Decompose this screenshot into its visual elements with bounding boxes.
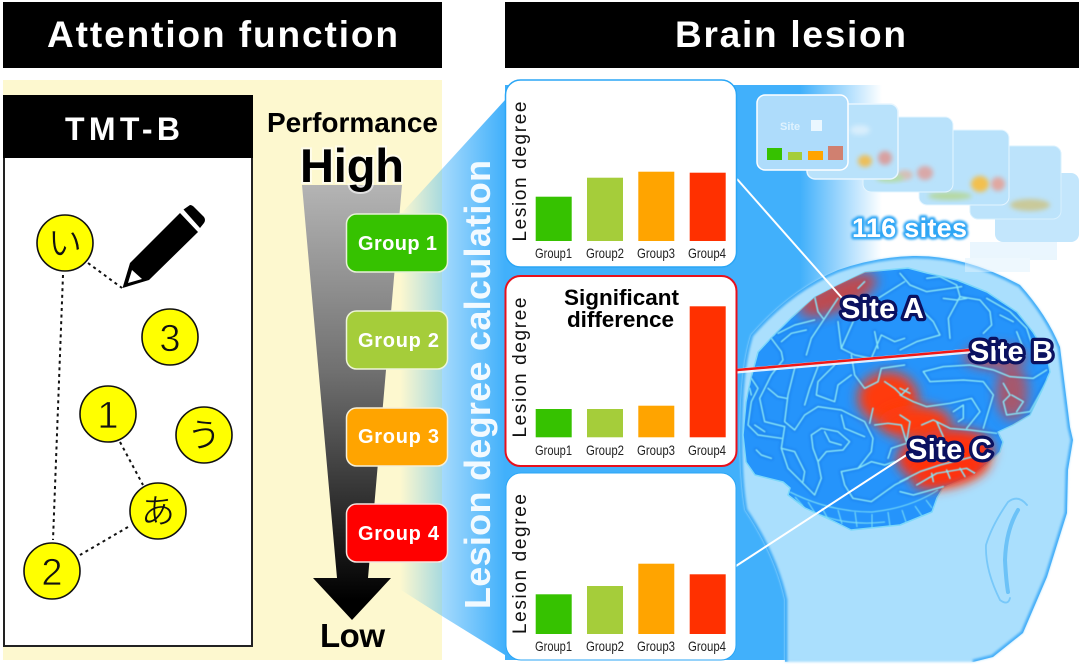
gyri shading xyxy=(748,273,1047,502)
connector: card 3 to Site C xyxy=(736,454,908,566)
label: 116 sites: 116 sites xyxy=(852,213,967,243)
box: Group 3: Group 3 xyxy=(358,426,439,448)
circle: 2 xyxy=(24,543,80,599)
dotted trail lines xyxy=(53,263,143,555)
connector: card 1 to Site A xyxy=(737,179,842,298)
box: Group 1 xyxy=(346,214,448,272)
group labels: Group4 xyxy=(688,442,726,458)
box: Group 2: Group 2 xyxy=(358,330,439,352)
header: Brain lesion xyxy=(505,2,1079,68)
icon: pencil xyxy=(122,205,205,288)
header: Attention function xyxy=(3,2,442,68)
group labels: Group3 xyxy=(637,245,675,261)
group labels: Group4 xyxy=(688,638,726,654)
group labels: Group1 xyxy=(535,638,572,654)
label: High: High xyxy=(300,139,404,192)
group labels xyxy=(535,442,726,458)
label: Site B: Site B xyxy=(970,336,1053,368)
group labels: Group4 xyxy=(688,245,726,261)
y axis label: Lesion degree xyxy=(510,494,531,634)
group labels: Group1 xyxy=(535,442,572,458)
label: 116 sites: 116 sites xyxy=(852,213,967,243)
wedge linking groups to charts xyxy=(390,100,505,655)
chart card 1: no difference xyxy=(506,80,736,267)
group labels: Group1 xyxy=(535,245,572,261)
arrow: performance high to low xyxy=(302,185,402,620)
label: High: High xyxy=(300,139,404,192)
label: Site C: Site C xyxy=(908,434,992,466)
group labels: Group2 xyxy=(586,245,624,261)
circle: い: い xyxy=(48,225,82,263)
label: Site A: Site A xyxy=(841,293,924,325)
box: Group 4 xyxy=(346,504,448,562)
box: Group 1: Group 1 xyxy=(358,233,437,255)
circle: 1 xyxy=(80,386,136,442)
icon: ear xyxy=(986,499,1027,603)
circle: 3: 3 xyxy=(159,318,181,360)
TMT-B title bar xyxy=(3,95,253,158)
panel: blue background behind charts xyxy=(505,85,882,660)
circle: 2: 2 xyxy=(41,552,63,594)
bars xyxy=(536,172,726,241)
TMT-B title bar: TMT-B xyxy=(65,111,180,147)
group labels: Group3 xyxy=(637,638,675,654)
box: Group 4: Group 4 xyxy=(358,523,440,545)
chart card 2: significant difference xyxy=(506,276,736,466)
faded stack of 116 site charts xyxy=(757,95,1079,272)
site chart card 6 xyxy=(995,173,1079,242)
chart card 3: no difference xyxy=(506,473,736,660)
label: Performance: Performance xyxy=(267,107,438,138)
header: Attention function: Attention function xyxy=(47,14,398,55)
group labels: Group2 xyxy=(586,638,624,654)
cerebellum folds xyxy=(790,490,938,528)
panel: TMT-B test sheet xyxy=(3,95,253,646)
cerebrum and cerebellum base xyxy=(743,268,1050,530)
site chart card 4 xyxy=(919,130,1009,205)
site chart card 2 xyxy=(807,104,898,179)
circle: あ: あ xyxy=(141,493,175,531)
circle: う: う xyxy=(187,417,221,455)
header: Brain lesion: Brain lesion xyxy=(675,14,906,55)
circle: う xyxy=(176,407,232,463)
circle: い xyxy=(37,215,93,271)
circle: 1: 1 xyxy=(97,395,119,437)
group labels xyxy=(535,245,726,261)
site chart card 1 xyxy=(757,95,848,170)
bars xyxy=(536,564,726,634)
y axis label: Lesion degree xyxy=(510,298,531,438)
group labels: Group2 xyxy=(586,442,624,458)
bars xyxy=(536,306,726,437)
y axis label: Lesion degree xyxy=(510,102,531,242)
callout: significant difference: difference xyxy=(567,307,674,332)
circle: あ xyxy=(130,483,186,539)
label: Low: Low xyxy=(320,617,385,654)
panel: attention background xyxy=(3,80,442,660)
box: Group 2 xyxy=(346,311,448,369)
callout: significant difference: Significant xyxy=(564,285,680,310)
circle: 3 xyxy=(142,309,198,365)
brain illustration xyxy=(743,264,1050,530)
site chart card 1: Site xyxy=(780,121,800,133)
callout: significant difference xyxy=(564,285,680,332)
gyri lines xyxy=(748,273,1047,502)
vertical title: Lesion degree calculation: Lesion degree calculation xyxy=(457,160,498,609)
connector: card 2 to Site B xyxy=(737,350,970,371)
group labels xyxy=(535,638,726,654)
box: Group 3 xyxy=(346,408,448,466)
lesion heat: sites xyxy=(794,264,1028,495)
head silhouette xyxy=(740,256,1073,662)
site chart card 5 xyxy=(970,146,1061,219)
group labels: Group3 xyxy=(637,442,675,458)
site chart card 3 xyxy=(863,117,953,192)
